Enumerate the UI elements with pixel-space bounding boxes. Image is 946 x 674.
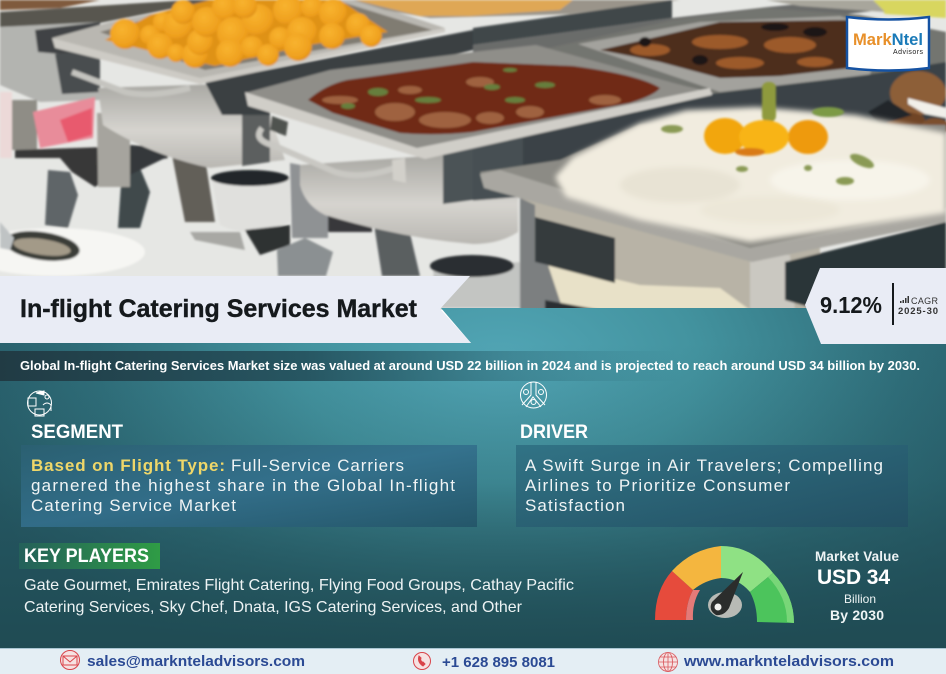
meatballs at right — [890, 71, 946, 115]
photo: chafing dishes with food — [0, 0, 946, 310]
tray 1 rim — [52, 0, 445, 84]
heading: key players: KEY PLAYERS — [24, 546, 149, 567]
market summary strip: Global In-flight Catering Services Market size was valued at around USD 22 billion in 2024 and is projected to reach around USD 34 billion by 2030. — [20, 359, 920, 373]
menu tags — [45, 170, 78, 228]
stew tray handle — [259, 128, 395, 175]
CAGR badge: 2025-30 — [898, 306, 938, 317]
market value text: Billion — [844, 592, 876, 606]
key players list: Gate Gourmet, Emirates Flight Catering, Flying Food Groups, Cathay Pacific — [24, 577, 574, 594]
market value text: USD 34 — [817, 566, 890, 589]
CAGR badge: 9.12% — [820, 292, 882, 318]
stew tray rim — [245, 45, 710, 157]
rice herbs — [661, 107, 876, 185]
market summary strip — [0, 351, 920, 381]
dark roast food — [600, 20, 850, 78]
heading: driver: DRIVER — [520, 421, 588, 443]
tray 1 dark band — [205, 30, 473, 115]
panel: segment text: Full-Service Carriers — [231, 456, 404, 475]
title banner: In-flight Catering Services Market — [20, 295, 418, 323]
icon: phone — [414, 652, 430, 670]
heading: segment: SEGMENT — [31, 421, 123, 443]
panel: driver text: A Swift Surge in Air Travelers; Compelling — [525, 456, 883, 475]
stew — [308, 62, 660, 134]
rice — [555, 107, 946, 242]
key players list — [24, 577, 574, 616]
gauge hub — [708, 592, 742, 618]
market value text — [815, 549, 899, 623]
back right tray — [540, 8, 946, 95]
panel: driver text: Airlines to Prioritize Consumer — [525, 476, 790, 495]
top right yellow — [873, 0, 946, 18]
rice tray rim — [480, 125, 946, 260]
panel: segment text — [21, 445, 477, 527]
table shadows — [15, 145, 168, 187]
panel: segment text: Catering Service Market — [31, 496, 236, 515]
top middle food and tray — [353, 0, 680, 18]
logo: MarkNtel Advisors: Advisors — [893, 49, 924, 56]
golden food balls — [105, 0, 388, 68]
tray 1 body — [98, 84, 285, 168]
icon: globe — [658, 652, 678, 672]
market value text: By 2030 — [830, 607, 884, 623]
bowl near centre — [433, 262, 520, 308]
tray 1 legs — [97, 113, 130, 187]
pink card — [33, 97, 95, 148]
stew tray legs — [290, 163, 328, 238]
panel: driver text: Satisfaction — [525, 496, 625, 515]
icon: small bar chart — [900, 296, 909, 303]
icon: driver people wheel — [520, 382, 546, 408]
teal background panel — [0, 308, 946, 674]
tray 1 handle — [72, 72, 190, 94]
icon: segment globe — [28, 391, 52, 416]
far left tray — [0, 0, 215, 158]
stew tray body — [300, 155, 518, 244]
title banner — [0, 276, 471, 343]
market value text: Market Value — [815, 549, 899, 564]
panel: segment text: garnered the highest share in the Global In-flight — [31, 476, 455, 495]
panel: driver text — [516, 445, 908, 527]
panel: segment text: Based on Flight Type: — [31, 456, 225, 475]
contact footer: www.marknteladvisors.com — [683, 653, 894, 670]
plate and spoon — [0, 228, 145, 276]
orange pepper — [704, 82, 828, 156]
logo: MarkNtel Advisors — [847, 17, 929, 70]
logo: MarkNtel Advisors: MarkNtel — [853, 30, 923, 49]
CAGR badge: CAGR — [911, 296, 938, 306]
icon: mail — [60, 650, 80, 670]
contact footer: +1 628 895 8081 — [442, 654, 555, 671]
gauge needle — [711, 572, 743, 615]
bowl — [212, 178, 290, 232]
contact footer — [0, 648, 946, 674]
dark band under stew and back tray — [522, 62, 946, 167]
key players list: Catering Services, Sky Chef, Dnata, IGS Catering Services, and Other — [24, 599, 523, 616]
rice tray lower body — [520, 198, 820, 310]
gauge chart — [655, 546, 794, 623]
CAGR badge — [805, 268, 946, 344]
contact footer: sales@marknteladvisors.com — [87, 653, 305, 670]
